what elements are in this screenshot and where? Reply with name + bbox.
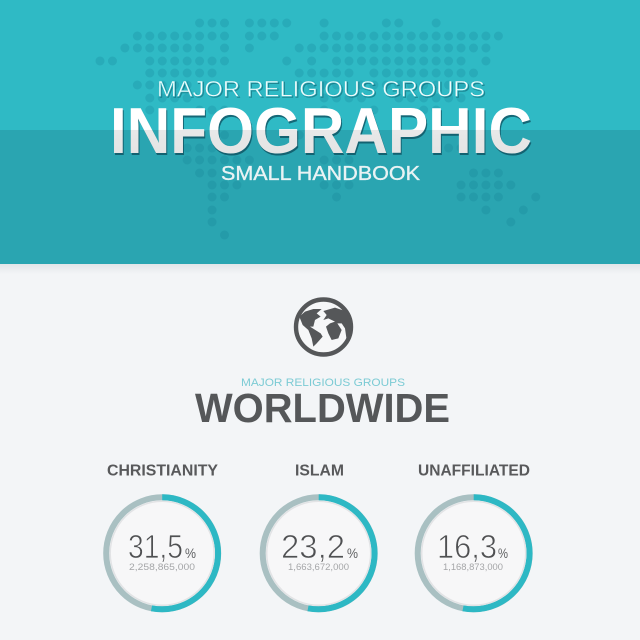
section title: worldwide: WORLDWIDE bbox=[195, 385, 450, 431]
donut chart: unaffiliated: 16,3 bbox=[437, 528, 497, 565]
label: unaffiliated: UNAFFILIATED bbox=[418, 462, 530, 480]
heading: major religious groups: MAJOR RELIGIOUS GROUPS bbox=[157, 76, 485, 102]
donut chart: islam: 1,663,672,000 bbox=[288, 562, 349, 572]
dotted world map bbox=[100, 23, 537, 235]
label: christianity: CHRISTIANITY bbox=[107, 462, 218, 480]
donut chart: unaffiliated: 1,168,873,000 bbox=[443, 562, 503, 572]
donut chart: islam: 23,2 bbox=[281, 528, 345, 565]
donut chart: christianity: % bbox=[185, 545, 196, 561]
icon: globe bbox=[296, 300, 352, 354]
donut chart: christianity: 31,5 bbox=[128, 528, 183, 565]
donut chart: islam: % bbox=[347, 545, 358, 561]
donut chart: unaffiliated: % bbox=[498, 545, 508, 561]
section heading: major religious groups: MAJOR RELIGIOUS GROUPS bbox=[241, 377, 405, 389]
label: islam: ISLAM bbox=[295, 462, 344, 480]
subtitle: small handbook: SMALL HANDBOOK bbox=[221, 163, 421, 185]
donut chart: christianity bbox=[106, 497, 218, 609]
donut chart: unaffiliated bbox=[418, 497, 530, 609]
title: infographic: INFOGRAPHIC bbox=[110, 94, 532, 167]
donut chart: christianity: 2,258,865,000 bbox=[129, 562, 195, 572]
donut chart: islam bbox=[263, 497, 375, 609]
panel: header banner bbox=[0, 0, 640, 274]
